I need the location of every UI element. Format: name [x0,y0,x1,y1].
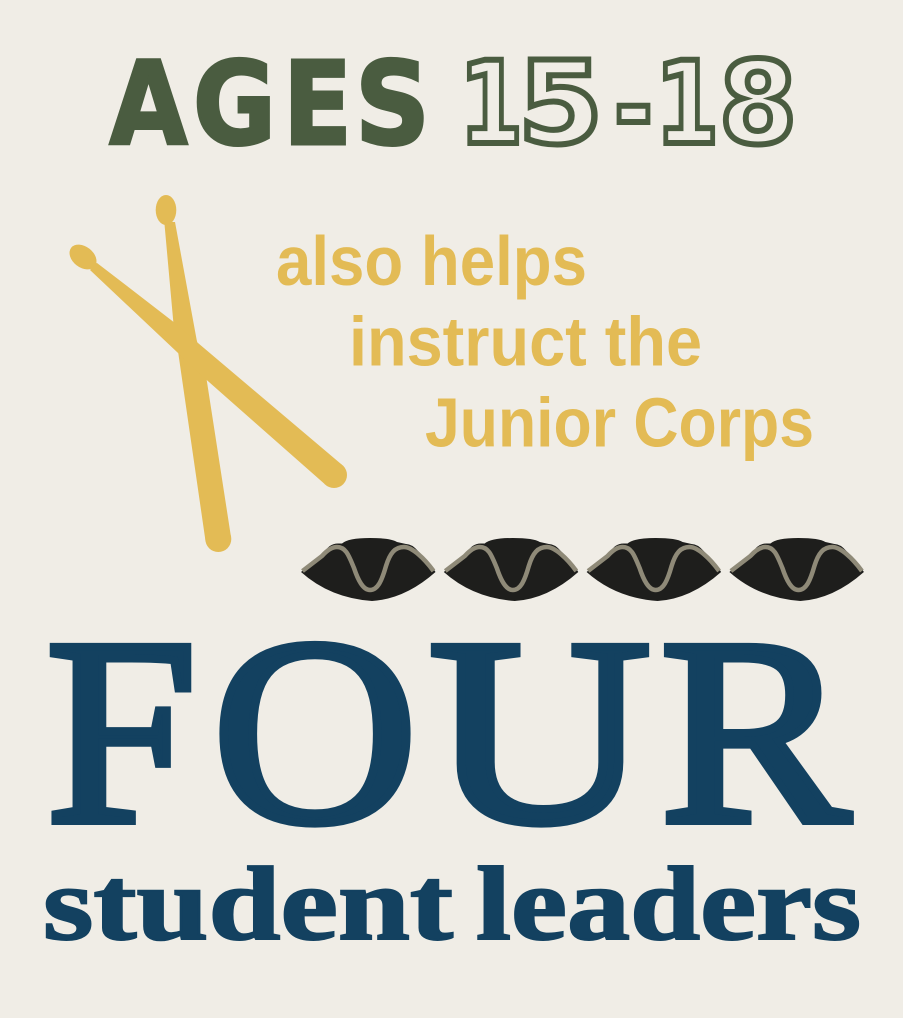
heading: ages: G [193,38,276,172]
heading: ages [110,38,430,172]
heading: four: O [212,584,418,879]
heading: four: R [660,584,851,879]
icon: tricorn hat 4 [729,538,864,601]
subheading: student leaders [43,845,861,962]
heading: ages: A [110,38,188,172]
icon: tricorn hat 3 [587,538,721,601]
text block: junior corps note: Junior Corps [425,384,814,462]
icon: tricorn hat 1 [301,538,436,601]
heading: four [46,584,851,879]
icons: four tricorn hats [301,538,864,601]
heading: ages: E [283,38,352,172]
heading: four: F [46,584,197,879]
heading: outlined age range [459,37,797,174]
heading: outlined age range: 5 [518,37,603,170]
heading: outlined age range: 1 [459,37,523,170]
subheading: student leaders: leaders [476,845,861,962]
text block: junior corps note [276,222,814,462]
icon: tricorn hat 2 [444,538,578,601]
heading: outlined age range: - [614,41,653,174]
subheading: student leaders: student [43,845,453,962]
icon: crossed drumsticks [65,195,347,552]
heading: four: U [429,584,651,879]
heading: outlined age range: 1 [655,37,719,170]
heading: ages: S [355,38,430,172]
text block: junior corps note: also helps [276,222,587,300]
heading: outlined age range: 8 [719,37,797,170]
text block: junior corps note: instruct the [349,302,702,380]
